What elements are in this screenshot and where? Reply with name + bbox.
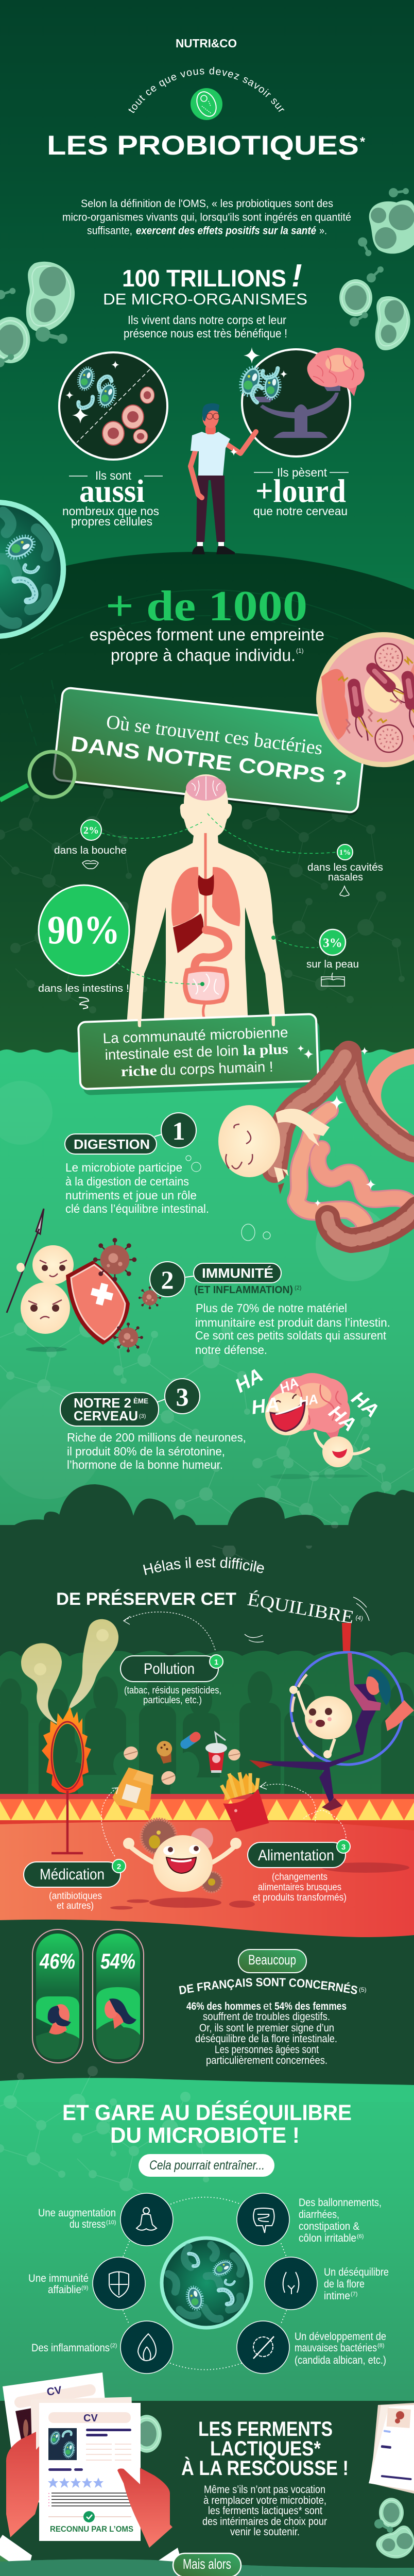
illustration: microbiome circle — [0, 502, 63, 636]
illustration: main CV with hands — [0, 2397, 195, 2576]
text: digestion: à la digestion de certains — [65, 1175, 189, 1188]
callout: 1% nose: 1% — [339, 849, 351, 857]
callout: 3% skin: 3% — [323, 936, 342, 950]
text: digestion: clé dans l’équilibre intestinal. — [65, 1202, 209, 1215]
callout: pollution: Pollution — [144, 1660, 195, 1677]
text: presence: Ils vivent dans notre corps et leur — [128, 313, 286, 327]
text: digestion: nutriments et joue un rôle — [65, 1189, 197, 1202]
panel: richest community: intestinale est de loin — [105, 1042, 239, 1063]
background: upper section — [0, 0, 414, 592]
decorative: bubbles — [0, 1081, 390, 1499]
callout: medication: et autres) — [57, 1901, 94, 1911]
text: second brain: Riche de 200 millions de neurones, — [67, 1431, 246, 1444]
node: intimate flora: (7) — [351, 2291, 357, 2297]
pill: could cause — [139, 2154, 274, 2177]
node: immunity — [28, 2257, 145, 2310]
panel: same number circle — [59, 352, 167, 460]
text: empreinte: (1) — [296, 647, 304, 654]
illustration: main CV with hands: RECONNU PAR L’OMS — [50, 2525, 133, 2534]
item: second brain: CERVEAU — [74, 1408, 138, 1423]
node: bloating — [237, 2193, 382, 2246]
item: immunity: 2 — [161, 1265, 174, 1294]
panel: scale vs brain circle — [237, 347, 365, 456]
node: intimate flora: Un déséquilibre — [324, 2266, 389, 2278]
heading: 100 trillions: 100 TRILLIONS — [122, 265, 286, 292]
pill: so then — [173, 2553, 241, 2576]
text: immunity: Plus de 70% de notre matériel — [196, 1301, 347, 1315]
heading: ferments: LACTIQUES* — [210, 2437, 321, 2460]
node: inflammation: (2) — [110, 2343, 117, 2349]
background: imbalance section — [0, 2078, 414, 2411]
text: ferments: Même s’ils n’ont pas vocation — [204, 2484, 325, 2496]
text: digestive troubles: Les personnes âgées sont — [215, 2044, 319, 2056]
node: intimate flora — [265, 2257, 389, 2310]
item: digestion: 1 — [172, 1116, 185, 1145]
decorative: small bubbles — [186, 1156, 270, 1241]
heading: 100 trillions: DE MICRO-ORGANISMES — [103, 290, 307, 308]
illustration: man — [191, 403, 256, 554]
illustration: happy egg — [123, 1819, 242, 1892]
arrow: food to fries — [260, 1782, 346, 1838]
item: second brain: 3 — [176, 1382, 188, 1411]
node: bad bacteria: mauvaises bactéries — [295, 2342, 377, 2354]
intro paragraph: ». — [319, 225, 327, 237]
node: bloating: (6) — [357, 2233, 364, 2240]
panel: richest community — [78, 1014, 321, 1095]
callout: 2% mouth: dans la bouche — [54, 845, 127, 856]
illustration: circus floor — [0, 1821, 414, 1937]
decorative: sparkles — [26, 2575, 370, 2576]
pill: could cause: Cela pourrait entraîner... — [149, 2158, 265, 2173]
illustration: aerial performer — [249, 1623, 414, 1811]
panel: richest community: riche — [120, 1063, 157, 1080]
text: presence — [124, 313, 287, 340]
callout: beaucoup — [238, 1950, 306, 1973]
text: HA HA: HA — [324, 1401, 360, 1436]
text: second brain: il produit 80% de la sérotonine, — [67, 1445, 225, 1458]
item: immunity: (2) — [295, 1285, 301, 1291]
arrow: pollution to ghost — [124, 1612, 215, 1650]
intro paragraph: Selon la définition de l'OMS, « les probiotiques sont des — [81, 198, 333, 210]
node: bloating: Des ballonnements, — [299, 2197, 382, 2209]
text: ferments: les ferments lactiques* sont — [208, 2505, 322, 2517]
callout: 90% gut — [38, 885, 204, 1009]
decorative: pale cells dark section — [132, 2415, 414, 2566]
text: digestive troubles — [186, 2001, 347, 2066]
text: presence: présence nous est très bénéfique ! — [124, 327, 287, 340]
text: HA HA: HA — [277, 1374, 301, 1396]
text: plus lourd: que notre cerveau — [253, 504, 348, 518]
text: plus lourd — [253, 466, 349, 518]
text: ferments: venir le soutenir. — [230, 2526, 300, 2538]
banner: where in the body: Où se trouvent ces bactéries — [105, 711, 324, 759]
decorative: dotted ring — [123, 2197, 286, 2370]
callout: medication: 2 — [117, 1862, 121, 1871]
node: bad bacteria: (8) — [377, 2343, 384, 2349]
text: empreinte: espèces forment une empreinte — [90, 625, 324, 644]
illustration: central microbiome — [162, 2238, 251, 2328]
curved subtitle: tout ce que vous devez savoir sur — [128, 67, 284, 113]
callout: 2% mouth — [54, 820, 202, 869]
text: second brain: l’hormone de la bonne humeur. — [67, 1458, 223, 1471]
heading: hard to preserve: DE PRÉSERVER CET — [56, 1589, 236, 1609]
node: stress: du stress — [70, 2218, 106, 2230]
callout: 3% skin — [271, 929, 359, 986]
banner: where in the body: DANS NOTRE CORPS ? — [70, 732, 348, 790]
heading: beware imbalance: ET GARE AU DÉSÉQUILIBRE — [62, 2100, 352, 2125]
panel: richest community: La communauté microbienne — [102, 1024, 288, 1046]
text: immunity: notre défense. — [195, 1343, 267, 1357]
illustration: main CV with hands: CV — [83, 2413, 98, 2424]
stat: plus de 1000: + de 1000 — [106, 582, 307, 630]
node: inflammation — [31, 2321, 173, 2374]
text: aussi nombreux: Ils sont — [95, 469, 132, 482]
node: stress: Une augmentation — [38, 2207, 116, 2219]
callout: food: Alimentation — [258, 1847, 334, 1864]
text: HA HA: HA — [232, 1364, 267, 1397]
text: ferments — [202, 2484, 327, 2538]
illustration: ring of fire — [42, 1707, 91, 1853]
node: bad bacteria: (candida albican, etc.) — [295, 2354, 386, 2366]
text: empreinte: propre à chaque individu. — [111, 646, 296, 665]
item: immunity — [150, 1262, 301, 1297]
illustration: crowd — [0, 1650, 414, 1803]
text: second brain — [67, 1431, 246, 1471]
text: digestive troubles: 54% des femmes — [274, 2001, 347, 2012]
background wave: lower section top — [0, 2560, 414, 2576]
illustration: soldier eggs with shield — [7, 1209, 161, 1352]
item: second brain: (3) — [139, 1413, 146, 1419]
title: * — [360, 134, 366, 149]
decorative: network imbalance — [0, 2066, 209, 2204]
text: HA HA: HA — [347, 1387, 383, 1422]
callout: 1% nose — [208, 814, 383, 896]
callout: 90% gut: dans les intestins ! — [38, 983, 129, 994]
background: green functions section — [0, 1046, 414, 1540]
text: aussi nombreux: aussi — [79, 474, 145, 509]
illustration: hill — [0, 552, 414, 1056]
callout: medication: (antibiotiques — [49, 1891, 102, 1902]
callout: pollution: 1 — [214, 1658, 218, 1667]
node: bad bacteria: Un développement de — [295, 2331, 386, 2343]
illustration: laughing brain — [265, 1373, 369, 1479]
illustration: intestine character — [274, 1054, 414, 1241]
stat: women 54% — [93, 1929, 144, 2063]
callout: medication: Médication — [40, 1866, 105, 1883]
text: immunity: immunitaire est produit dans l’intestin. — [195, 1316, 390, 1329]
intro paragraph — [62, 198, 351, 237]
illustration: back CV: CV — [46, 2384, 63, 2398]
text: digestive troubles: déséquilibre de la flore intestinale. — [195, 2033, 337, 2045]
callout: food: et produits transformés) — [253, 1892, 347, 1903]
text: HA HA — [232, 1364, 383, 1436]
text: HA HA: HA — [250, 1394, 281, 1419]
heading: hard to preserve: Hélas il est difficile — [143, 1557, 264, 1575]
illustration: pills and junk food — [111, 1730, 270, 1833]
decorative: wave scallops ferments — [0, 2401, 414, 2416]
text: ferments: des intérimaires de choix pour — [202, 2516, 327, 2528]
callout: food: (changements — [272, 1872, 327, 1883]
heading: ferments: LES FERMENTS — [198, 2418, 333, 2441]
item: immunity: (ET INFLAMMATION) — [194, 1284, 293, 1296]
callout: 90% gut: 90% — [47, 907, 120, 952]
decorative: bushes — [0, 1484, 414, 1546]
illustration: circus ring strip — [0, 1794, 414, 1831]
item: second brain — [60, 1379, 200, 1426]
intro paragraph: suffisante, — [87, 225, 132, 237]
node: bad bacteria — [237, 2321, 386, 2374]
intro paragraph: exercent des effets positifs sur la santé — [136, 225, 316, 237]
node: bloating: constipation & — [299, 2221, 359, 2232]
node: immunity: Une immunité — [28, 2273, 89, 2284]
illustration: back CV — [3, 2372, 106, 2473]
illustration: toxic smoke — [21, 1619, 118, 1726]
curved text: french concerned: DE FRANÇAIS SONT CONCERNÉS — [179, 1977, 357, 1995]
illustration: dark wave under floor — [0, 1920, 414, 2087]
item: immunity: IMMUNITÉ — [202, 1265, 273, 1281]
background: dark circus section — [0, 1525, 414, 2092]
callout: 1% nose: nasales — [328, 872, 363, 883]
node: immunity: (9) — [81, 2285, 88, 2291]
decorative: pale cells — [0, 188, 414, 368]
text: immunity — [195, 1301, 390, 1357]
text: aussi nombreux: nombreux que nos — [62, 504, 159, 518]
text: digestive troubles: Or, ils sont le premier signe d’un — [199, 2022, 334, 2034]
heading: beware imbalance: DU MICROBIOTE ! — [110, 2123, 300, 2148]
text: digestion — [65, 1161, 209, 1215]
illustration: human body — [127, 774, 286, 1025]
text: HA HA: HA — [298, 1391, 319, 1410]
node: intimate flora: de la flore — [324, 2278, 365, 2290]
heading: ferments: À LA RESCOUSSE ! — [181, 2456, 349, 2480]
node: intimate flora: intime — [324, 2290, 350, 2302]
logo: top: NUTRI&CO — [176, 37, 237, 50]
panel: richest community: du corps humain ! — [160, 1059, 273, 1078]
text: digestive troubles: et — [263, 2001, 272, 2012]
heading: hard to preserve: (4) — [355, 1614, 364, 1622]
heading: 100 trillions: ! — [291, 258, 302, 294]
item: digestion: DIGESTION — [74, 1137, 150, 1152]
node: inflammation: Des inflammations — [31, 2342, 110, 2354]
node: bloating: côlon irritable — [299, 2232, 356, 2244]
callout: 1% nose: dans les cavités — [307, 862, 383, 873]
heading: hard to preserve: ÉQUILIBRE — [246, 1588, 355, 1628]
text: aussi nombreux: propres cellules — [71, 515, 152, 528]
heading: hard to preserve — [56, 1557, 370, 1663]
background: lower criteria section — [0, 2560, 414, 2576]
callout: food: 3 — [341, 1843, 346, 1852]
intro paragraph: micro-organismes vivants qui, lorsqu'ils sont ingérés en quantité — [62, 211, 351, 224]
heading: ferments — [181, 2418, 349, 2480]
text: immunity: Ce sont ces petits soldats qui assurent — [195, 1329, 387, 1342]
node: stress: (10) — [106, 2219, 116, 2226]
item: digestion — [65, 1113, 196, 1154]
callout: food: alimentaires brusques — [258, 1882, 341, 1893]
callout: pollution: particules, etc.) — [143, 1695, 202, 1706]
item: second brain: NOTRE 2 — [74, 1395, 131, 1411]
text: digestive troubles: particulièrement concernées. — [206, 2055, 327, 2066]
callout: beaucoup: Beaucoup — [248, 1952, 296, 1968]
callout: medication — [24, 1859, 126, 1911]
illustration: pink bacteria circle — [319, 635, 414, 765]
heading: 100 trillions — [103, 258, 307, 308]
icon: magnifier — [0, 752, 75, 800]
heading: beware imbalance — [62, 2100, 352, 2148]
text: aussi nombreux — [62, 469, 163, 528]
callout: pollution — [120, 1655, 223, 1706]
callout: pollution: (tabac, résidus pesticides, — [124, 1685, 221, 1696]
stat: men 46% — [32, 1929, 83, 2063]
icon: bacterium badge — [191, 88, 222, 120]
text: plus lourd: +lourd — [255, 472, 346, 509]
background wave: top of imbalance — [0, 2078, 414, 2102]
callout: 3% skin: sur la peau — [306, 959, 359, 970]
callout: food — [248, 1840, 350, 1903]
decorative fingerprint lines — [10, 590, 407, 752]
arrow: medication to food — [101, 1788, 118, 1856]
node: stress — [38, 2193, 173, 2246]
stat: women 54%: 54% — [100, 1949, 135, 1973]
decorative: network green — [0, 1293, 414, 1570]
illustration: right side document — [369, 2403, 414, 2494]
stat: men 46%: 46% — [39, 1949, 75, 1973]
item: second brain: ÈME — [133, 1397, 148, 1405]
node: bloating: diarrhées, — [299, 2209, 339, 2221]
footnote mark: (5) — [359, 1986, 367, 1993]
text: empreinte — [90, 625, 324, 665]
text: ferments: à remplacer votre microbiote, — [203, 2495, 326, 2506]
decorative: scalloped wave — [0, 1049, 414, 1061]
title: LES PROBIOTIQUES — [47, 130, 359, 161]
callout: 2% mouth: 2% — [83, 825, 99, 836]
text: digestion: Le microbiote participe — [65, 1161, 182, 1174]
panel: richest community: la plus — [243, 1041, 288, 1059]
pill: so then: Mais alors — [183, 2556, 231, 2572]
banner: where in the body — [53, 687, 368, 816]
text: digestive troubles: souffrent de troubles digestifs. — [203, 2011, 330, 2023]
background: dark ferments section — [0, 2401, 414, 2571]
illustration: sleeping egg — [218, 1047, 376, 1207]
text: digestive troubles: 46% des hommes — [186, 2001, 261, 2012]
decorative: network — [0, 778, 405, 1013]
text: plus lourd: Ils pèsent — [277, 466, 327, 479]
decorative: floor shadows — [110, 1862, 409, 1909]
node: immunity: affaiblie — [48, 2284, 81, 2296]
